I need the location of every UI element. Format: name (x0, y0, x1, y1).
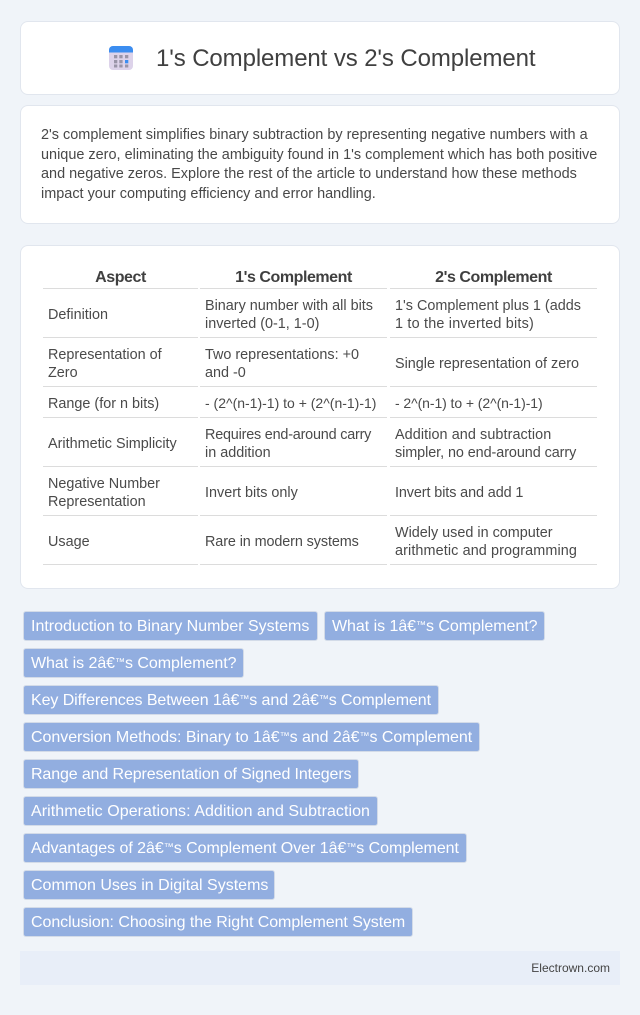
row: negative number representation: Invert bits only (205, 485, 298, 501)
chip: arithmetic (23, 796, 378, 826)
section link chips (23, 611, 545, 937)
row: arithmetic simplicity: simpler, no end-around carry (395, 445, 576, 461)
intro card (20, 105, 620, 224)
row: representation of zero: Single representation of zero (395, 356, 579, 372)
intro text: impact your computing efficiency and error handling. (41, 186, 376, 202)
row: representation of zero: and -0 (205, 365, 246, 381)
table header: 2's Complement (435, 269, 552, 286)
chip: what is 2's (23, 648, 244, 678)
table header: Aspect (95, 269, 146, 286)
table header (95, 269, 552, 286)
row: definition: inverted (0-1, 1-0) (205, 316, 319, 332)
row: representation of zero (48, 347, 579, 381)
chip: range (23, 759, 359, 789)
chip: conclusion (23, 907, 413, 937)
chip: common uses: Common Uses in Digital Systems (31, 877, 268, 894)
chip: introduction: Introduction to Binary Number Systems (31, 618, 309, 635)
table header: 1's Complement (235, 269, 352, 286)
chip: common uses (23, 870, 275, 900)
chip: advantages (23, 833, 467, 863)
row: usage (48, 525, 577, 559)
intro text: and negative zeros. Explore the rest of the article to understand how these methods (41, 166, 577, 182)
row: usage: Usage (48, 534, 90, 550)
row: range (48, 395, 543, 412)
comparison table (43, 269, 597, 565)
chip: conversion methods (23, 722, 480, 752)
chip: what is 1's (324, 611, 545, 641)
chip: range: Range and Representation of Signed Integers (31, 766, 351, 783)
row: negative number representation: Invert bits and add 1 (395, 485, 523, 501)
row: range: - 2^(n-1) to + (2^(n-1)-1) (395, 395, 543, 411)
chip: what is 1's: What is 1â€™s Complement? (332, 618, 538, 635)
table card (20, 245, 620, 589)
intro text: unique zero, eliminating the ambiguity found in 1's complement which has both positive (41, 146, 597, 162)
row: usage: Widely used in computer (395, 525, 553, 541)
row: definition: Binary number with all bits (205, 298, 373, 314)
chip: what is 2's: What is 2â€™s Complement? (31, 655, 237, 672)
row: arithmetic simplicity (48, 427, 576, 461)
row: range: Range (for n bits) (48, 396, 159, 412)
chip: key differences: Key Differences Between 1â€™s and 2â€™s Complement (31, 692, 431, 709)
row: arithmetic simplicity: Arithmetic Simplicity (48, 436, 177, 452)
row: negative number representation: Representation (48, 494, 146, 510)
row: definition: Definition (48, 307, 108, 323)
title: 1's Complement vs 2's Complement (156, 45, 535, 72)
chip: conversion methods: Conversion Methods: Binary to 1â€™s and 2â€™s Complement (31, 729, 472, 746)
intro text (41, 127, 597, 202)
row: arithmetic simplicity: Requires end-around carry (205, 427, 371, 443)
footer credit: Electrown.com (531, 961, 610, 975)
row: usage: Rare in modern systems (205, 534, 359, 550)
row: negative number representation (48, 476, 523, 510)
chip: advantages: Advantages of 2â€™s Complement Over 1â€™s Complement (31, 840, 459, 857)
chip: key differences (23, 685, 439, 715)
chip: introduction (23, 611, 318, 641)
icon: calendar grid (109, 46, 133, 70)
row: representation of zero: Zero (48, 365, 78, 381)
row: representation of zero: Two representations: +0 (205, 347, 359, 363)
header card (20, 21, 620, 95)
intro text: 2's complement simplifies binary subtraction by representing negative numbers with a (41, 127, 588, 143)
row: arithmetic simplicity: in addition (205, 445, 271, 461)
chip: arithmetic: Arithmetic Operations: Addition and Subtraction (31, 803, 370, 820)
chip: conclusion: Conclusion: Choosing the Right Complement System (31, 914, 405, 931)
row: definition: 1's Complement plus 1 (adds (395, 298, 581, 314)
row: definition (48, 298, 581, 332)
row: definition: 1 to the inverted bits) (395, 316, 534, 332)
row: negative number representation: Negative Number (48, 476, 160, 492)
row: usage: arithmetic and programming (395, 543, 577, 559)
row: arithmetic simplicity: Addition and subtraction (395, 427, 551, 443)
footer (20, 951, 620, 985)
row: representation of zero: Representation of (48, 347, 162, 363)
row: range: - (2^(n-1)-1) to + (2^(n-1)-1) (205, 395, 376, 411)
